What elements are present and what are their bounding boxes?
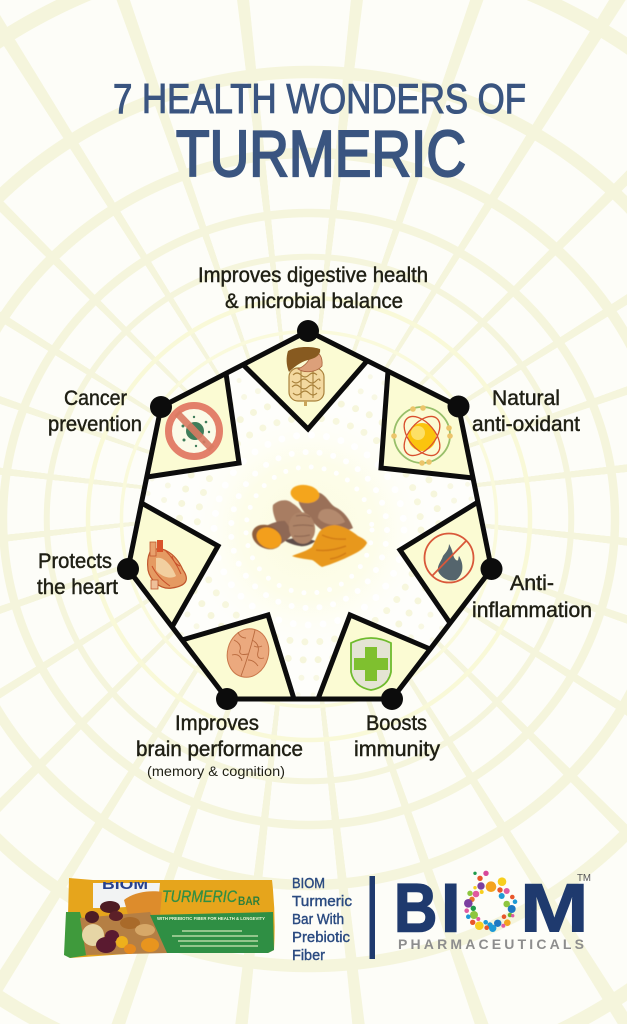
title: 7 HEALTH WONDERS OF [113,75,526,122]
text: product caption: Prebiotic [292,930,350,946]
logo: BIOM Pharmaceuticals [394,870,591,952]
divider line [370,876,375,959]
label: immunity: immunity [354,738,441,761]
label: anti-inflammation: Anti- [510,572,554,595]
label: anti-inflammation [472,572,592,622]
heptagon outline [128,331,492,699]
logo: coloured dot ring [464,871,517,932]
panel: heart [128,503,218,627]
heptagon panel [128,331,492,699]
label: digestive health: Improves digestive health [198,264,428,287]
label: anti-oxidant [472,387,580,436]
text: product caption: Fiber [292,948,325,964]
icon: brain [222,624,274,682]
vertex markers [117,320,502,710]
panel: anti-oxidant [381,371,473,478]
label: cancer prevention: Cancer [64,387,127,410]
label: anti-inflammation: inflammation [472,599,592,622]
title [113,75,526,190]
icon: no cancer cell [168,406,220,456]
label: cancer prevention: prevention [48,413,142,436]
icon: no flame [424,534,474,582]
label: heart [37,550,118,599]
icon: shield with cross [351,638,391,690]
label: brain performance: (memory & cognition) [147,763,285,779]
text: product caption: BIOM [292,876,325,892]
product: turmeric bar pack: TURMERIC [162,887,238,906]
text: product caption: Turmeric [292,894,352,910]
label: digestive health [198,264,428,313]
label: heart: the heart [37,576,118,599]
logo: BIOM Pharmaceuticals: PHARMACEUTICALS [398,936,584,952]
logo: BIOM Pharmaceuticals: M [520,870,589,946]
label: immunity [354,712,441,761]
panel: anti-inflammation [400,502,492,623]
icon: atom [391,405,453,466]
label: cancer prevention [48,387,142,436]
text: product caption: Bar With [292,912,344,928]
product: turmeric bar pack: BIOM [102,876,148,893]
label: brain performance: brain performance [136,738,303,761]
label: anti-oxidant: anti-oxidant [472,413,580,436]
illustration: turmeric roots and powder [248,483,367,567]
product: turmeric bar pack: BAR [238,894,260,908]
panel: cancer prevention [147,373,239,477]
label: digestive health: & microbial balance [225,290,403,313]
icon: liver and intestines [287,347,324,406]
product: turmeric bar pack: WITH PREBIOTIC FIBER FOR HEALTH & LONGEVITY [157,916,265,921]
product: turmeric bar pack [64,876,275,958]
label: anti-oxidant: Natural [492,387,560,410]
label: brain performance [136,712,303,779]
logo: BIOM Pharmaceuticals: TM [577,872,591,884]
label: heart: Protects [38,550,112,573]
logo: BIOM Pharmaceuticals: I [441,870,460,946]
panel: brain performance [182,615,294,699]
logo: BIOM Pharmaceuticals: B [394,870,437,946]
panel: digestive health [243,331,367,429]
icon: heart [148,540,186,589]
label: immunity: Boosts [366,712,427,735]
text: product caption [292,876,352,964]
panel: immunity [318,615,430,699]
label: brain performance: Improves [175,712,259,735]
title: TURMERIC [176,117,466,190]
